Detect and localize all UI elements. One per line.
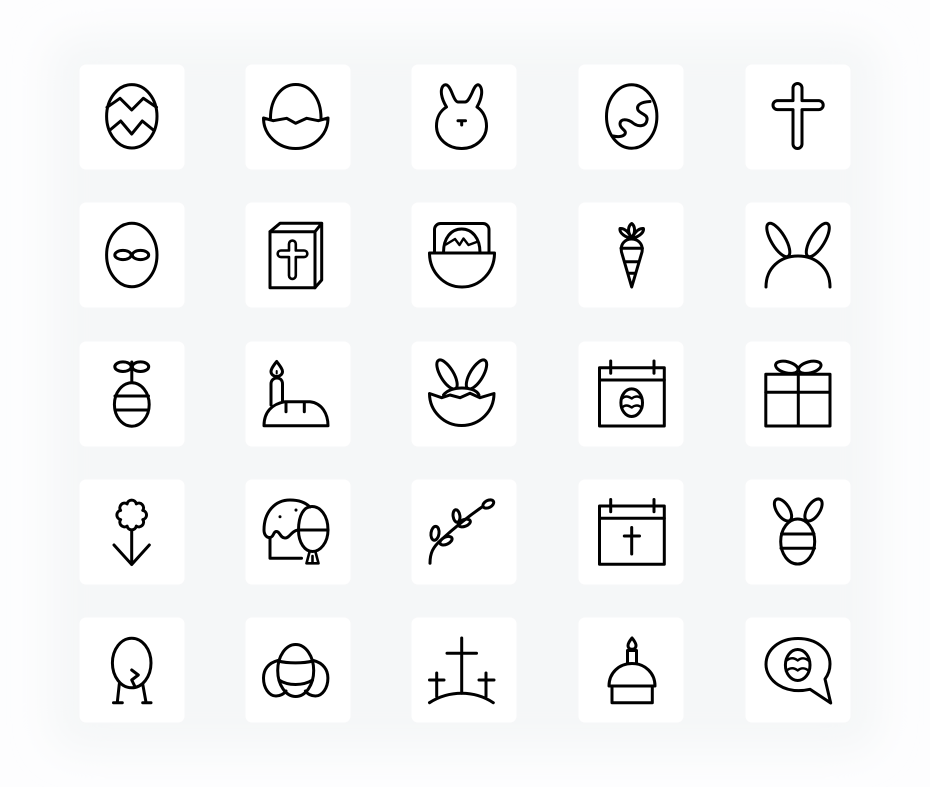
- card: cross: [745, 64, 851, 170]
- icon: willow branch: [430, 498, 495, 563]
- card: speech bubble with egg: [745, 617, 851, 723]
- card: bunny head: [411, 64, 517, 170]
- card: egg calendar: [578, 341, 684, 447]
- icon: three crosses on hill: [430, 638, 494, 703]
- card: three crosses on hill: [411, 617, 517, 723]
- icon: cross: [773, 84, 823, 148]
- card: easter basket: [411, 202, 517, 308]
- card: bible: [245, 202, 351, 308]
- card: zigzag egg: [79, 64, 185, 170]
- card: cake with candle: [578, 617, 684, 723]
- icon: swirl egg: [606, 85, 657, 148]
- icon: bunny ears headband: [763, 220, 834, 287]
- card: swirl egg: [578, 64, 684, 170]
- icon: cake with candle: [609, 638, 655, 703]
- card: cross calendar: [578, 479, 684, 585]
- icon: three eggs: [264, 644, 328, 696]
- icon: candle and bread: [264, 362, 328, 426]
- icon: zigzag egg: [107, 85, 157, 148]
- card: willow branch: [411, 479, 517, 585]
- card: hanging egg ornament: [79, 341, 185, 447]
- card: three eggs: [245, 617, 351, 723]
- card: candle and bread: [245, 341, 351, 447]
- icon: cross calendar: [600, 500, 664, 564]
- card: bunny ears in eggshell: [411, 341, 517, 447]
- icon: egg calendar: [600, 361, 664, 426]
- icon: egg with legs: [112, 638, 151, 703]
- card: bunny ears headband: [745, 202, 851, 308]
- card: carrot: [578, 202, 684, 308]
- icon: egg with bow: [107, 223, 157, 287]
- icon: bunny egg: [771, 496, 826, 564]
- card: egg with bow: [79, 202, 185, 308]
- icon: speech bubble with egg: [766, 638, 831, 703]
- icon: gift box: [766, 359, 830, 426]
- icon: flower: [114, 500, 149, 564]
- card: cracked egg: [245, 64, 351, 170]
- icon: hanging egg ornament: [114, 362, 149, 426]
- icon: cracked egg: [264, 84, 328, 148]
- card: easter cake and egg cup: [245, 479, 351, 585]
- icon: carrot: [620, 224, 643, 287]
- card: flower: [79, 479, 185, 585]
- icon: easter cake and egg cup: [264, 500, 328, 563]
- card: egg with legs: [79, 617, 185, 723]
- icon: bunny head: [436, 85, 486, 148]
- card: bunny egg: [745, 479, 851, 585]
- icon: bunny ears in eggshell: [430, 357, 494, 426]
- icon: bible: [270, 223, 322, 288]
- icon: easter basket: [430, 224, 494, 287]
- card: gift box: [745, 341, 851, 447]
